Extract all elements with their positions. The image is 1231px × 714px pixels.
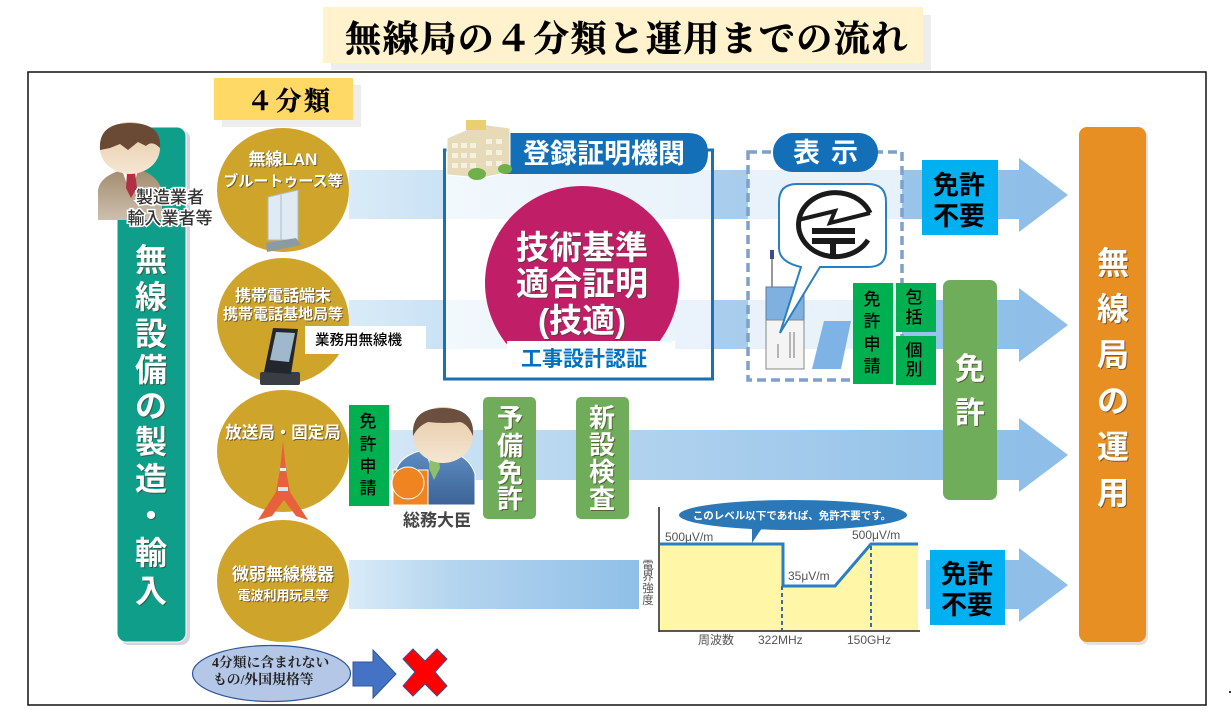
- box: new station inspection: 査: [589, 484, 615, 514]
- panel: operation bar: 運: [1097, 429, 1129, 465]
- label: license application (left): 許: [360, 435, 376, 454]
- pink circle: technical conformity: 適合証明: [516, 265, 648, 302]
- icon: manufacturer person: [98, 122, 162, 220]
- box: provisional license: 許: [497, 484, 523, 514]
- circle: broadcasting and fixed stations: [217, 390, 349, 520]
- circle: wireless LAN: [217, 128, 349, 252]
- label: license not required (row 1): 免許: [933, 170, 985, 200]
- chart labels: 電: [642, 559, 654, 572]
- label: manufacturers and importers: 製造業者: [136, 188, 204, 207]
- icon: tower: [258, 441, 308, 520]
- flow arrow: row 2: [349, 288, 1068, 362]
- panel: manufacturing bar: ・: [135, 498, 167, 534]
- panel: operation bar: 無: [1097, 245, 1129, 281]
- chart labels: 322MHz: [758, 633, 803, 647]
- title: [323, 7, 931, 70]
- panel: marking: [748, 133, 902, 380]
- panel: manufacturing bar: 備: [135, 352, 167, 388]
- chart labels: 周波数: [698, 632, 734, 647]
- header pill: 登録証明機関: [523, 139, 685, 169]
- box: new station inspection: 新: [589, 403, 615, 433]
- label: construction design certification: [507, 341, 675, 379]
- panel: manufacturing bar: 設: [135, 316, 167, 352]
- label: license application (right): [853, 283, 893, 384]
- label: construction design certification: 工事設計認証: [521, 347, 647, 371]
- circle: weak radio devices: [217, 520, 349, 642]
- pink circle: technical conformity: (技適): [538, 302, 626, 339]
- circle: weak radio devices: 微弱無線機器: [232, 565, 334, 584]
- chart labels: 150GHz: [847, 633, 891, 647]
- chart labels: [642, 528, 900, 647]
- icon: building: [447, 120, 512, 180]
- header pill: [500, 133, 708, 174]
- circle: broadcasting and fixed stations: 放送局・固定局: [225, 423, 341, 442]
- callout: level: このレベル以下であれば、免許不要です。: [693, 509, 891, 522]
- chart labels: 強: [642, 582, 654, 595]
- label: individual: [896, 336, 936, 385]
- circle: mobile phones: 携帯電話基地局等: [223, 305, 343, 323]
- panel: registered certification body: [444, 120, 712, 380]
- icon: handset and card: [766, 250, 851, 369]
- panel: manufacturing bar: 入: [135, 573, 167, 609]
- label: minister: 総務大臣: [403, 511, 471, 530]
- box: license: [943, 280, 997, 500]
- label: license application (left): 免: [360, 412, 376, 431]
- label: business radio: 業務用無線機: [315, 332, 402, 349]
- label: manufacturers and importers: [128, 188, 212, 228]
- chart labels: 度: [642, 594, 654, 607]
- box: provisional license: 免: [497, 458, 523, 488]
- callout: level: [679, 500, 907, 543]
- box: license: 許: [955, 397, 985, 430]
- panel: operation bar: の: [1097, 383, 1129, 419]
- label: individual: 個: [906, 341, 922, 360]
- ellipse: not in the four categories: もの/外国規格等: [213, 671, 314, 687]
- heading: 4分類: ４分類: [247, 87, 333, 116]
- label: license application (left): [349, 405, 389, 506]
- panel: manufacturing bar: の: [135, 388, 167, 424]
- chart labels: 500μV/m: [852, 528, 900, 542]
- label: blanket: [896, 283, 936, 332]
- label: license application (right): 申: [864, 335, 880, 354]
- label: license application (right): 許: [864, 312, 880, 331]
- label: license application (right): 請: [864, 357, 880, 376]
- circle: weak radio devices: 電波利用玩具等: [237, 588, 329, 603]
- circle: wireless LAN: ブルートゥース等: [223, 172, 343, 190]
- box: new station inspection: [576, 397, 629, 519]
- circle: mobile phones: 携帯電話端末: [235, 286, 331, 305]
- label: manufacturers and importers: 輸入業者等: [128, 209, 212, 228]
- icon: minister person with seal: [392, 407, 475, 505]
- box: provisional license: 備: [497, 431, 523, 461]
- box: new station inspection: 検: [589, 457, 615, 487]
- flow arrow: row 4: [349, 548, 1068, 622]
- heading: 4分類: [214, 78, 361, 127]
- label: license application (right): 免: [864, 290, 880, 309]
- panel: manufacturing bar: 造: [135, 461, 167, 497]
- flow arrow: row 3: [349, 418, 1068, 492]
- panel: operation bar: [1079, 127, 1148, 645]
- label: license application (left): 請: [360, 479, 376, 498]
- chart labels: 35μV/m: [788, 569, 830, 583]
- pink circle: technical conformity: 技術基準: [516, 229, 648, 266]
- arrow: to prohibited: [353, 650, 396, 698]
- label: license application (left): 申: [360, 457, 376, 476]
- icon: router: [266, 190, 301, 252]
- panel: operation bar: 線: [1097, 291, 1129, 327]
- label: license not required (row 4): 不要: [941, 590, 993, 620]
- label: license not required (row 1): 不要: [933, 201, 985, 231]
- title: 無線局の４分類と運用までの流れ: [345, 19, 909, 59]
- icon: red cross: [403, 649, 447, 696]
- panel: operation bar: 用: [1097, 475, 1129, 511]
- chart labels: 500μV/m: [665, 530, 713, 544]
- label: individual: 別: [906, 360, 922, 379]
- circle: wireless LAN: 無線LAN: [249, 150, 317, 169]
- label: license not required (row 4): 免許: [941, 559, 993, 589]
- panel: manufacturing bar: [117, 127, 190, 645]
- pink circle: technical conformity: [485, 186, 679, 380]
- circle: mobile phones: [217, 258, 349, 385]
- icon: smartphone: [260, 328, 300, 385]
- label: business radio: [305, 326, 426, 354]
- label: license not required (row 4): [930, 550, 1005, 625]
- panel: manufacturing bar: 製: [135, 424, 167, 460]
- pill: display: 表示: [793, 138, 869, 168]
- box: license: 免: [955, 353, 985, 386]
- box: new station inspection: 設: [589, 430, 615, 460]
- label: license not required (row 1): [922, 160, 998, 235]
- pill: display: [773, 133, 878, 172]
- chart: field strength limits: [642, 500, 920, 647]
- ellipse: not in the four categories: [192, 646, 350, 702]
- chart labels: 界: [642, 570, 654, 583]
- panel: operation bar: 局: [1097, 337, 1129, 373]
- panel: manufacturing bar: 輸: [135, 535, 167, 571]
- box: provisional license: [483, 397, 536, 519]
- panel: manufacturing bar: 線: [135, 279, 167, 315]
- label: blanket: 括: [906, 308, 922, 327]
- ellipse: not in the four categories: 4分類に含まれない: [212, 654, 329, 670]
- icon: technical conformity mark bubble: [779, 184, 886, 333]
- box: provisional license: 予: [497, 403, 523, 433]
- flow arrow: row 1: [349, 158, 1068, 232]
- label: blanket: 包: [906, 288, 922, 307]
- panel: manufacturing bar: 無: [135, 242, 167, 278]
